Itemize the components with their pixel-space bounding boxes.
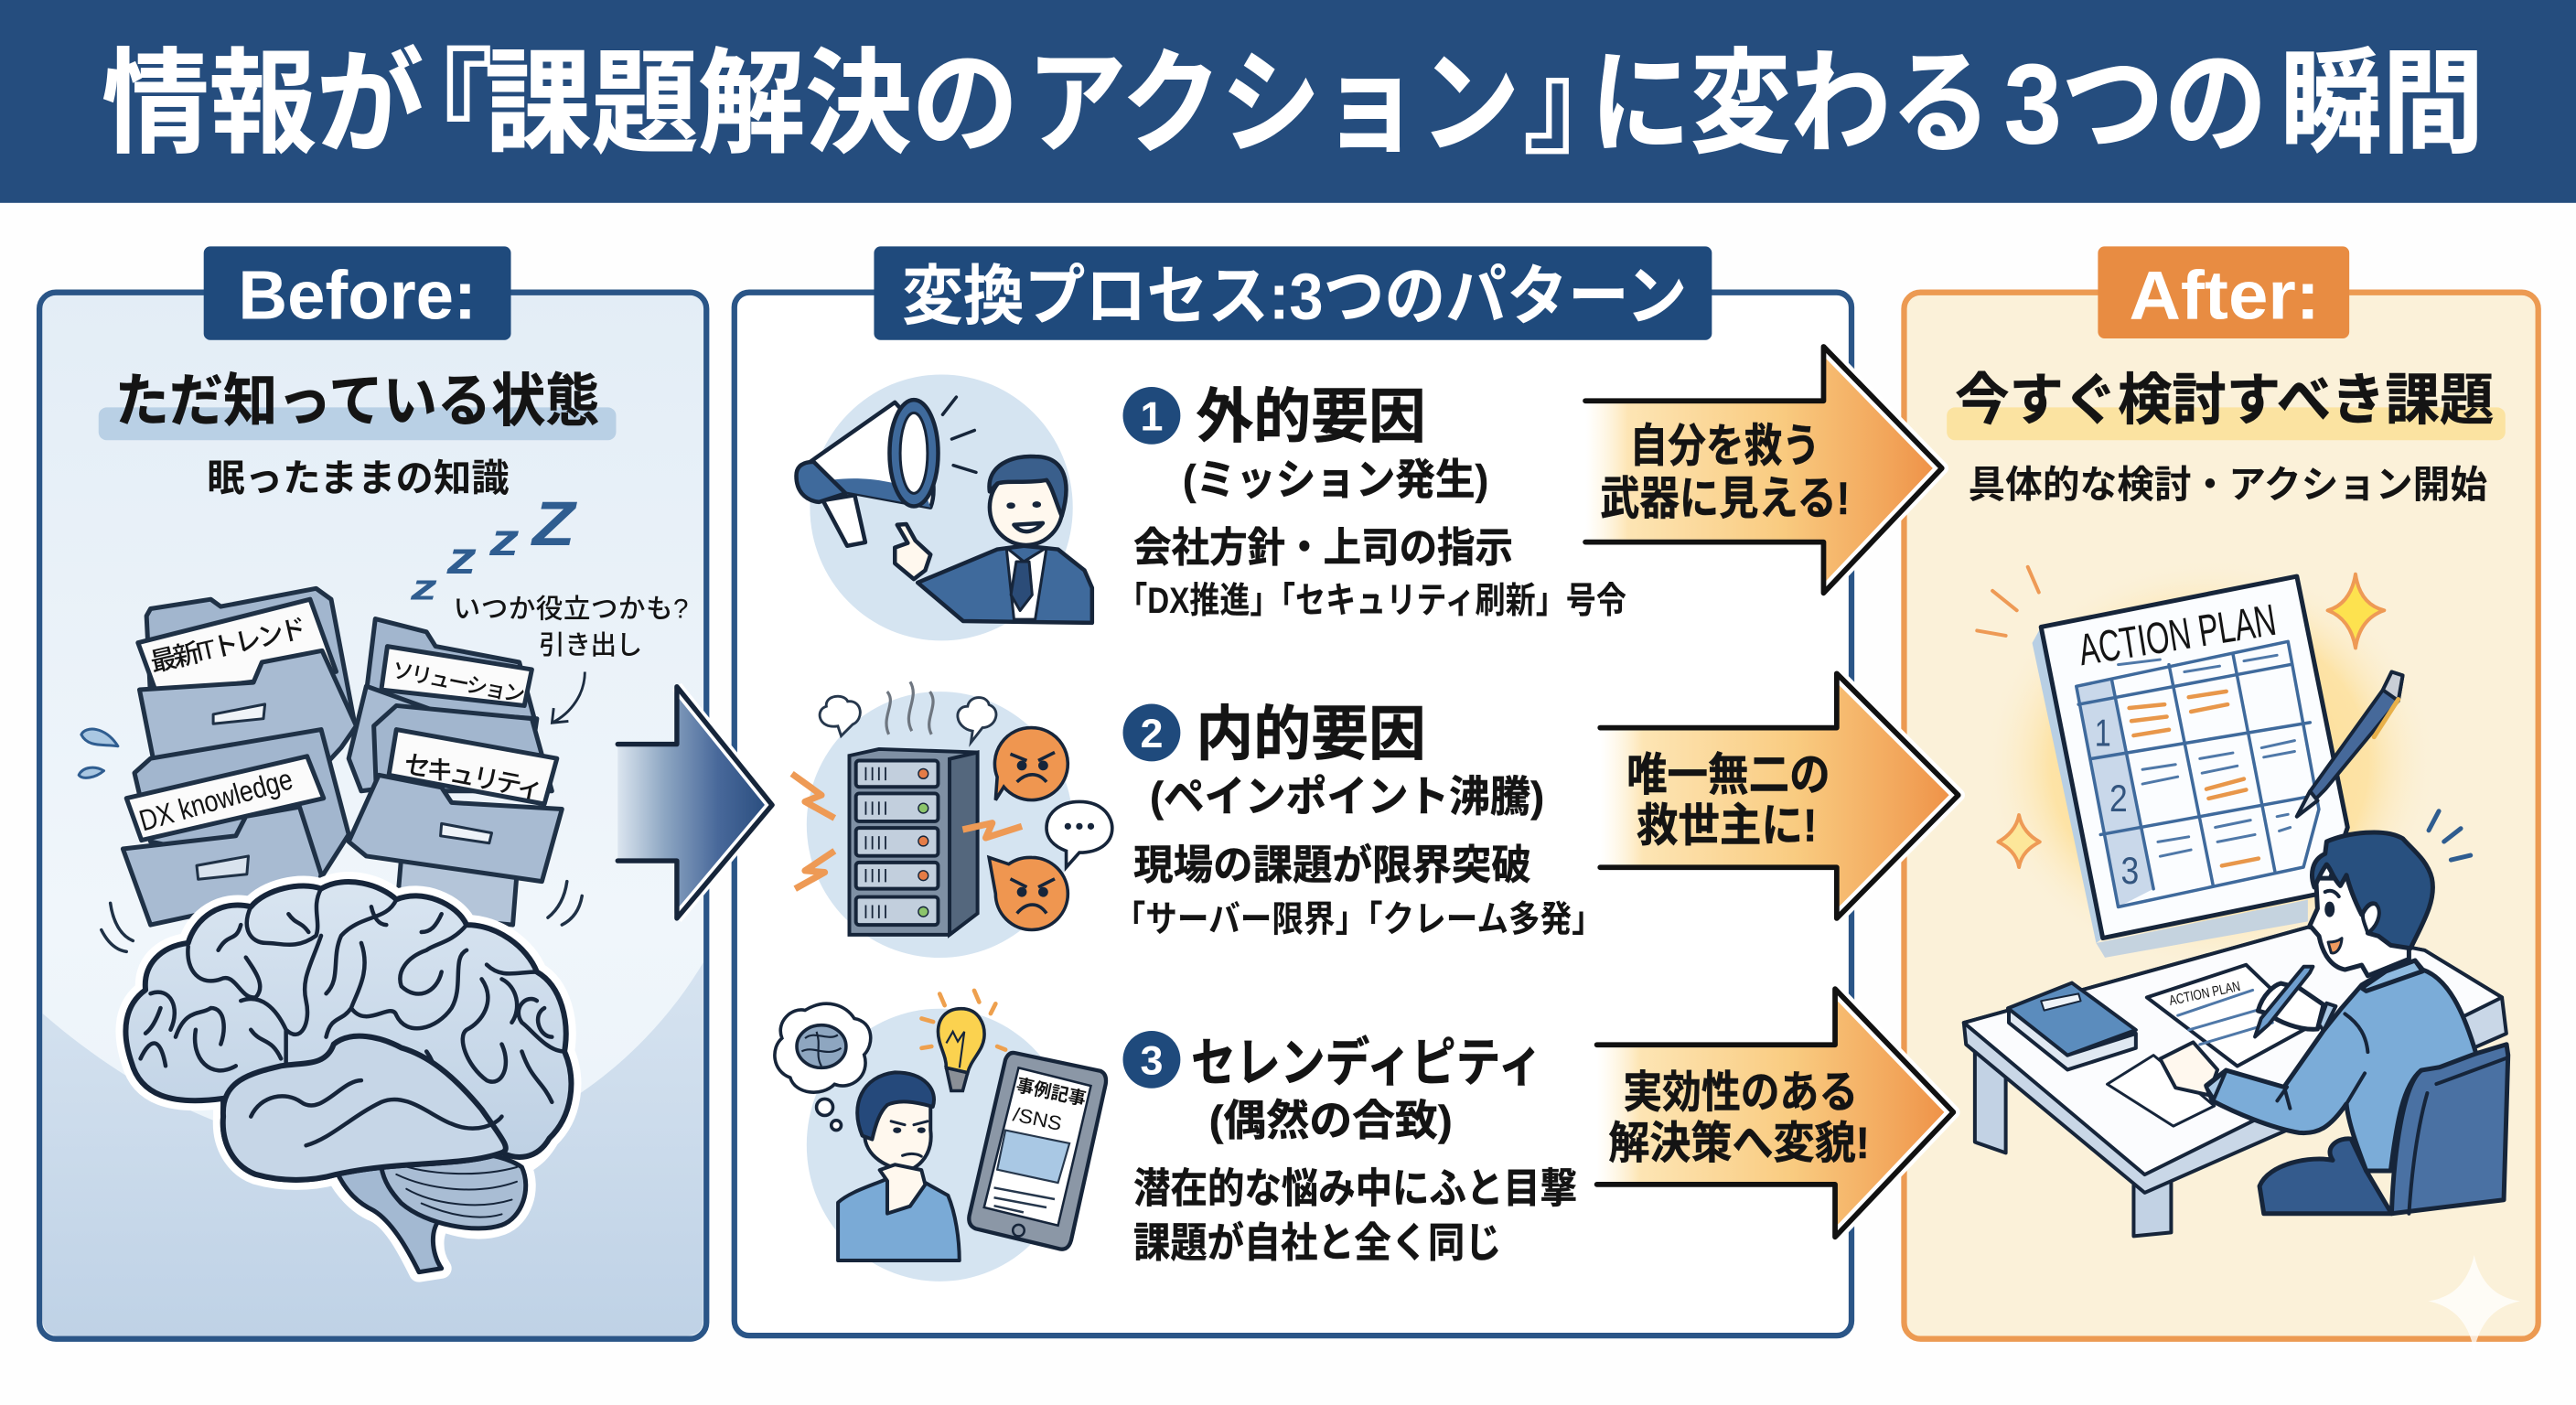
arrow: before to process bbox=[617, 687, 772, 918]
hand bbox=[895, 524, 930, 579]
sweat marks bbox=[79, 729, 118, 778]
desk paper title: ACTION PLAN bbox=[2168, 979, 2242, 1009]
arrow text 3: 実効性のある bbox=[1623, 1067, 1858, 1117]
row 2: internal factor bbox=[792, 673, 1959, 958]
desk paper bbox=[2147, 965, 2310, 1067]
speech bubble bbox=[1046, 801, 1112, 867]
sheet row numbers bbox=[2095, 712, 2139, 892]
thought cloud bbox=[775, 1003, 871, 1131]
title: 『 bbox=[380, 41, 493, 167]
suit bbox=[918, 546, 1092, 623]
title: 瞬間 bbox=[2281, 41, 2484, 167]
brain stem bbox=[336, 1160, 442, 1272]
title: アクション bbox=[1026, 41, 1519, 167]
description 3: 潜在的な悩み中にふと目撃 bbox=[1133, 1165, 1577, 1212]
writing hand and pen bbox=[2255, 967, 2335, 1036]
drawer: solution bbox=[349, 619, 537, 791]
title: 3つの bbox=[2004, 41, 2267, 167]
icon: sleeping z letters: z bbox=[410, 568, 437, 608]
sheet row numbers: 3 bbox=[2121, 850, 2139, 892]
icon: sleeping z letters bbox=[410, 489, 577, 608]
icon: megaphone and manager bbox=[796, 374, 1092, 640]
badge: before: Before: bbox=[238, 256, 477, 333]
arrow text 3 bbox=[1608, 1067, 1870, 1168]
arrow text 3: 解決策へ変貌! bbox=[1608, 1119, 1870, 1168]
steam bbox=[820, 681, 996, 743]
sheet row numbers: 1 bbox=[2095, 712, 2111, 754]
description 1: 会社方針・上司の指示 bbox=[1133, 524, 1513, 571]
title: 』 bbox=[1523, 41, 1637, 167]
arrow text 2 bbox=[1626, 748, 1830, 852]
icon: brain bbox=[125, 882, 571, 1272]
badge: before bbox=[204, 246, 511, 340]
desk bbox=[1964, 928, 2506, 1236]
heading 1: 外的要因 bbox=[1196, 383, 1426, 450]
drawer: latest IT trends bbox=[138, 588, 356, 791]
icon: person with phone and idea bbox=[775, 991, 1106, 1282]
arrow text 1: 自分を救う bbox=[1630, 420, 1820, 472]
number badge 1: 1 bbox=[1140, 393, 1163, 440]
arrow text 1: 武器に見える! bbox=[1600, 472, 1850, 524]
head bbox=[990, 469, 1062, 545]
row 3: serendipity bbox=[775, 989, 1953, 1282]
drawer: DX knowledge bbox=[123, 730, 349, 925]
temporal lobe bbox=[223, 1036, 506, 1180]
phone label bbox=[1011, 1076, 1088, 1135]
subtitle 1: (ミッション発生) bbox=[1183, 456, 1488, 504]
drawer note: いつか役立つかも? bbox=[454, 594, 688, 624]
burst lines bbox=[1977, 567, 2039, 636]
badge: after bbox=[2098, 246, 2349, 338]
legs bbox=[2259, 1139, 2391, 1214]
drawer label: DX knowledge bbox=[135, 762, 296, 837]
subtitle 3: (偶然の合致) bbox=[1209, 1097, 1453, 1144]
loose paper bbox=[2108, 1056, 2215, 1126]
number badge 1 bbox=[1123, 387, 1180, 445]
arrow text 2: 唯一無二の bbox=[1626, 748, 1830, 800]
arrow 3 bbox=[1597, 989, 1953, 1237]
panel: before bbox=[39, 246, 2538, 1350]
highlight bar bbox=[99, 407, 616, 440]
angry face bbox=[994, 728, 1068, 800]
drawer label: セキュリティ bbox=[402, 750, 545, 805]
badge: after: After: bbox=[2130, 256, 2320, 333]
cerebellum bbox=[381, 1153, 526, 1228]
drawer label: 最新ITトレンド bbox=[147, 614, 309, 678]
sheet title: ACTION PLAN bbox=[2076, 595, 2280, 675]
arrow text 2: 救世主に! bbox=[1637, 799, 1817, 852]
drawer label: ソリューション bbox=[390, 658, 527, 707]
action plan sheet bbox=[2033, 576, 2347, 958]
examples 1: 「DX推進」「セキュリティ刷新」号令 bbox=[1117, 581, 1626, 621]
number badge 2 bbox=[1123, 704, 1180, 761]
arrow 2 bbox=[1600, 673, 1959, 918]
light bulb bbox=[922, 991, 1005, 1090]
arrow 1 bbox=[1585, 347, 1942, 593]
heading 2: 内的要因 bbox=[1196, 700, 1426, 767]
watermark sparkle bbox=[2428, 1255, 2520, 1350]
subheading: before: 眠ったままの知識 bbox=[207, 457, 510, 499]
panel: after bbox=[1904, 246, 2538, 1350]
subheading: after: 具体的な検討・アクション開始 bbox=[1969, 464, 2487, 506]
number badge 3: 3 bbox=[1140, 1037, 1163, 1084]
drawer note bbox=[454, 594, 688, 660]
panel lower shade bbox=[43, 962, 703, 1335]
subtitle 2: (ペインポイント沸騰) bbox=[1150, 773, 1544, 820]
icon: sleeping z letters: z bbox=[445, 531, 477, 584]
title band bbox=[0, 0, 2576, 203]
number badge 2: 2 bbox=[1140, 710, 1163, 756]
heading: before: ただ知っている状態 bbox=[115, 370, 600, 434]
description 3 bbox=[1133, 1165, 1577, 1266]
server bbox=[849, 749, 978, 935]
drawer note: 引き出し bbox=[539, 631, 642, 660]
icon: sleeping z letters: Z bbox=[531, 489, 577, 559]
icon: sleeping z letters: z bbox=[488, 513, 520, 565]
angry face bbox=[989, 857, 1068, 929]
arrow text 1 bbox=[1600, 420, 1850, 524]
phone bbox=[969, 1053, 1106, 1249]
glow bbox=[1983, 559, 2436, 970]
shake lines bbox=[102, 882, 582, 951]
head bbox=[2310, 832, 2432, 976]
heading: after: 今すぐ検討すべき課題 bbox=[1955, 369, 2494, 431]
drawer: security bbox=[349, 705, 562, 882]
thinking person bbox=[838, 1072, 960, 1260]
row 1: external factor bbox=[796, 347, 1942, 640]
title: 情報が bbox=[102, 41, 424, 167]
sparkle bbox=[1998, 815, 2040, 867]
phone label: /SNS bbox=[1011, 1102, 1064, 1135]
arrow: note to drawer bbox=[552, 672, 585, 723]
illustration: action plan at desk bbox=[1964, 567, 2508, 1236]
icon: file drawers bbox=[79, 588, 582, 951]
action lines bbox=[2429, 811, 2471, 860]
phone label: 事例記事 bbox=[1014, 1076, 1088, 1110]
seated person bbox=[2206, 811, 2508, 1214]
title: 課題解決の bbox=[485, 41, 1018, 167]
left hand bbox=[2160, 1042, 2217, 1095]
title: に変わる bbox=[1590, 41, 1991, 167]
icon: overloaded server bbox=[792, 681, 1112, 958]
description 2: 現場の課題が限界突破 bbox=[1133, 842, 1531, 888]
title bbox=[102, 41, 2484, 167]
panel: transformation process bbox=[735, 246, 1852, 1335]
description 3: 課題が自社と全く同じ bbox=[1133, 1219, 1501, 1266]
lightning bolts bbox=[792, 774, 1022, 889]
torso and arm bbox=[2206, 960, 2476, 1171]
highlight bar bbox=[1947, 407, 2506, 440]
badge: process: 変換プロセス:3つのパターン bbox=[902, 260, 1687, 333]
number badge 3 bbox=[1123, 1031, 1180, 1089]
heading 3: セレンディピティ bbox=[1191, 1035, 1542, 1093]
pen bbox=[2297, 671, 2403, 817]
sheet row numbers: 2 bbox=[2109, 778, 2128, 820]
examples 2: 「サーバー限界」「クレーム多発」 bbox=[1114, 899, 1604, 939]
chair bbox=[2391, 1045, 2508, 1214]
sparkle bbox=[2328, 574, 2384, 648]
books bbox=[2008, 983, 2136, 1069]
